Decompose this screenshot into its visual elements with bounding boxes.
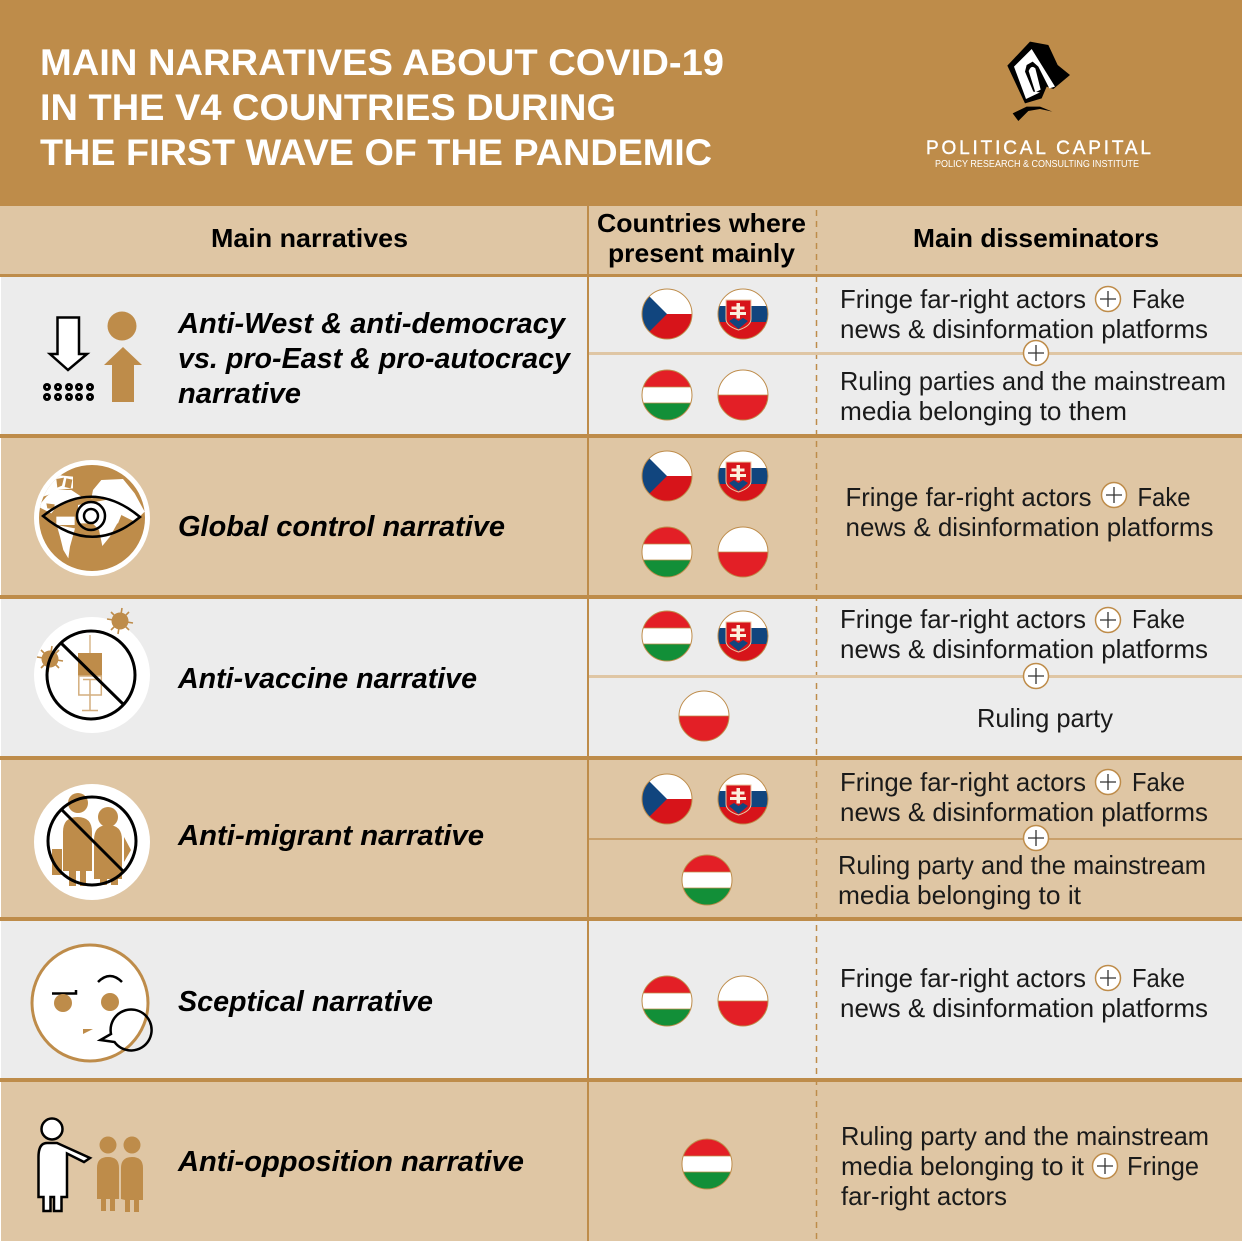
disseminators row 5: Fake xyxy=(1132,963,1185,993)
disseminators row 4: Fake xyxy=(1132,767,1185,797)
flags row 4 xyxy=(640,772,768,905)
column header band: present mainly xyxy=(608,238,796,268)
disseminators row 6: Fringe xyxy=(1127,1151,1199,1181)
disseminators row 3: Ruling party xyxy=(977,703,1113,733)
column header band xyxy=(0,206,1242,274)
header band xyxy=(0,0,1242,206)
disseminators row 3 xyxy=(840,604,1208,733)
disseminators row 1 xyxy=(840,284,1226,426)
disseminators row 6: Ruling party and the mainstream xyxy=(841,1121,1209,1151)
disseminators row 1: Fake xyxy=(1132,284,1185,314)
column header band: Countries where xyxy=(597,208,806,238)
disseminators row 5: news & disinformation platforms xyxy=(840,993,1208,1023)
icon: person pointing at opposition xyxy=(38,1118,143,1212)
logo: Political Capital: POLITICAL CAPITAL xyxy=(926,138,1151,159)
icon: sceptical face xyxy=(32,945,152,1061)
disseminators row 6: media belonging to it xyxy=(841,1151,1085,1181)
title: IN THE V4 COUNTRIES DURING xyxy=(40,86,616,128)
disseminators row 4: Fringe far-right actors xyxy=(840,767,1086,797)
disseminators row 3: Fringe far-right actors xyxy=(840,604,1086,634)
title: THE FIRST WAVE OF THE PANDEMIC xyxy=(40,131,712,173)
icon: people vs elite arrows xyxy=(43,312,142,402)
narrative 6 text: Anti-opposition narrative xyxy=(177,1146,524,1178)
disseminators row 3: news & disinformation platforms xyxy=(840,634,1208,664)
narrative 5 text: Sceptical narrative xyxy=(178,986,433,1018)
disseminators row 2 xyxy=(846,482,1214,542)
disseminators row 1: Ruling parties and the mainstream xyxy=(840,366,1226,396)
narrative 1 text: Anti-West & anti-democracy xyxy=(177,308,567,340)
disseminators row 5: Fringe far-right actors xyxy=(840,963,1086,993)
narrative 1 text: vs. pro-East & pro-autocracy xyxy=(178,343,572,375)
disseminators row 5 xyxy=(840,963,1208,1023)
icon: globe with eye xyxy=(34,460,150,576)
disseminators row 4 xyxy=(838,767,1208,910)
flags row 3 xyxy=(642,611,768,741)
disseminators row 4: media belonging to it xyxy=(838,880,1082,910)
narrative 1 text xyxy=(177,308,572,410)
disseminators row 4: Ruling party and the mainstream xyxy=(838,850,1206,880)
disseminators row 3: Fake xyxy=(1132,604,1185,634)
flags row 6 xyxy=(682,1139,732,1189)
icon: no migrants xyxy=(34,784,150,900)
logo: Political Capital: POLICY RESEARCH & CONSULTING INSTITUTE xyxy=(935,159,1139,170)
disseminators row 4: news & disinformation platforms xyxy=(840,797,1208,827)
narrative 1 text: narrative xyxy=(178,378,301,410)
disseminators row 1: news & disinformation platforms xyxy=(840,314,1208,344)
column header band: Main narratives xyxy=(211,223,408,253)
narrative 3 text: Anti-vaccine narrative xyxy=(177,663,477,695)
narrative 4 text: Anti-migrant narrative xyxy=(177,820,484,852)
flags row 2 xyxy=(640,449,768,577)
logo: Political Capital xyxy=(926,42,1151,170)
column header band: Main disseminators xyxy=(913,223,1159,253)
disseminators row 1: Fringe far-right actors xyxy=(840,284,1086,314)
disseminators row 6 xyxy=(841,1121,1209,1211)
disseminators row 1: media belonging to them xyxy=(840,396,1127,426)
disseminators row 2: Fake xyxy=(1138,482,1190,512)
narrative 2 text: Global control narrative xyxy=(178,511,505,543)
disseminators row 6: far-right actors xyxy=(841,1181,1007,1211)
flags row 1 xyxy=(640,287,768,420)
title: MAIN NARRATIVES ABOUT COVID-19 xyxy=(40,41,724,83)
disseminators row 2: Fringe far-right actors xyxy=(846,482,1092,512)
disseminators row 2: news & disinformation platforms xyxy=(846,512,1214,542)
icon: no vaccine xyxy=(34,608,150,733)
title xyxy=(40,41,724,173)
flags row 5 xyxy=(642,976,768,1026)
